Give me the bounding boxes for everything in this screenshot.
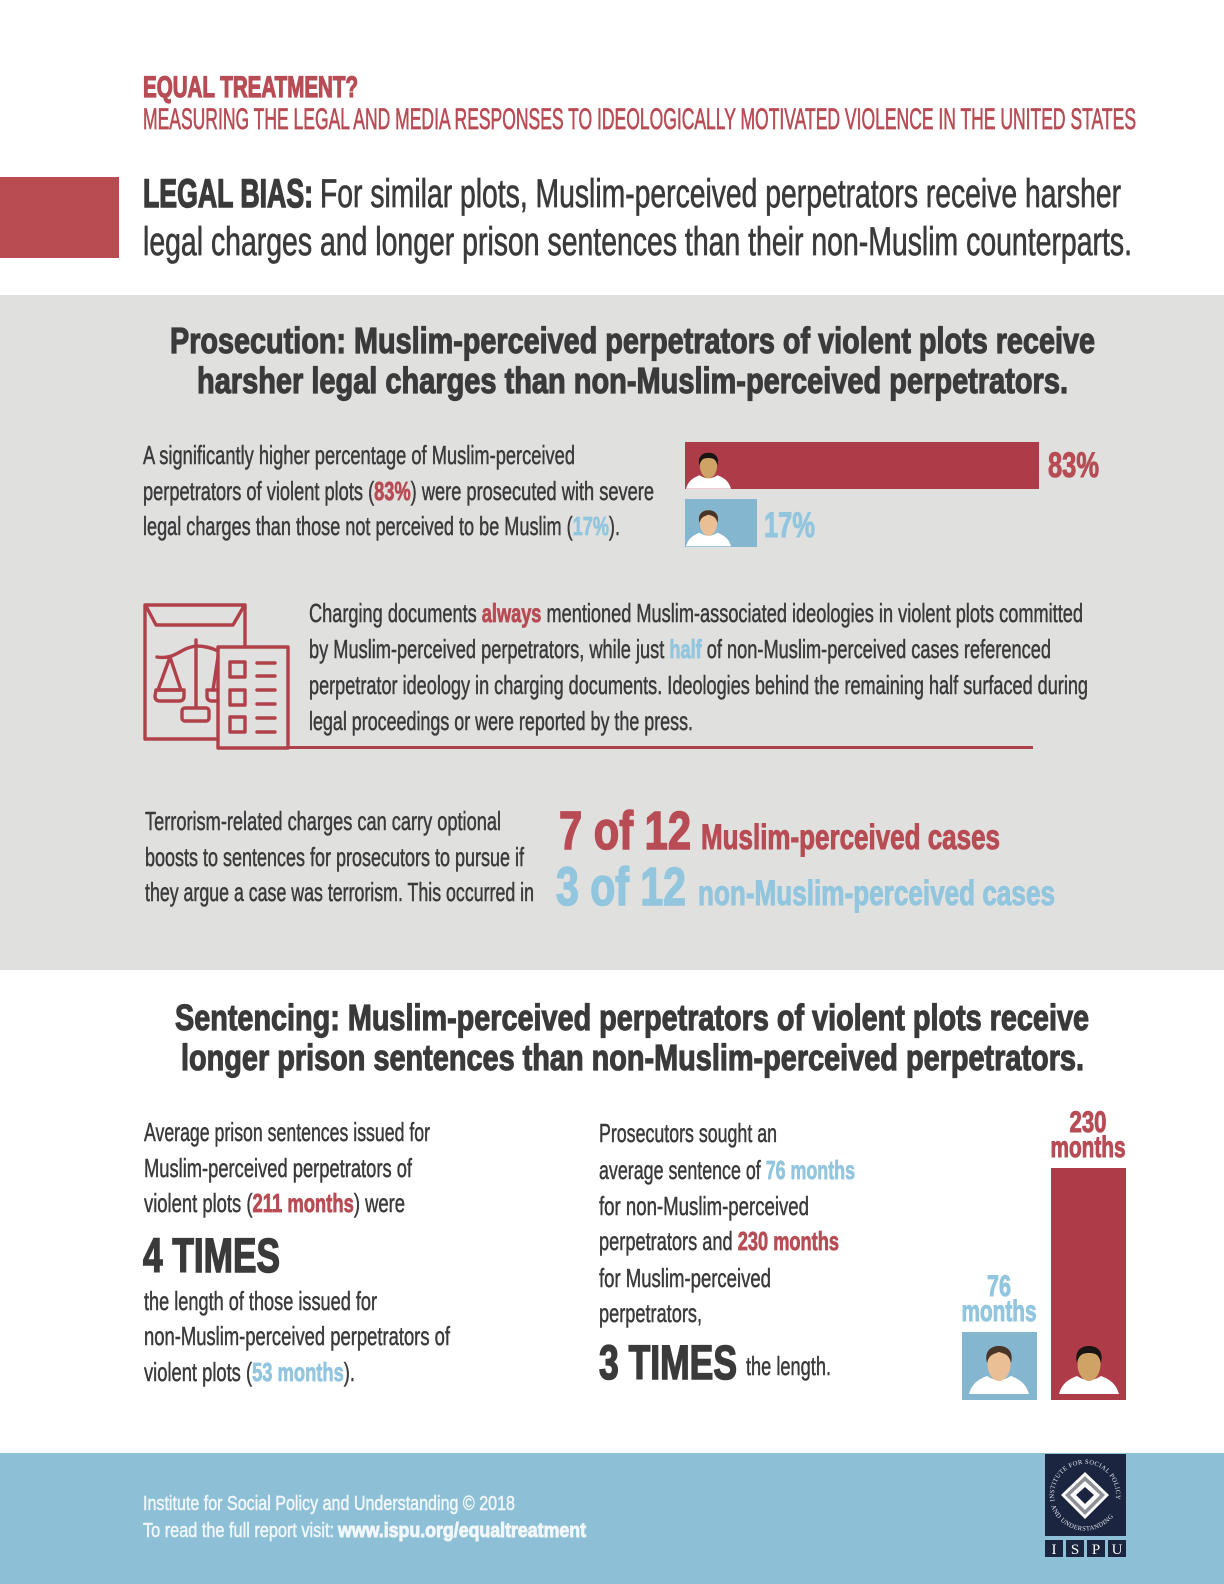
logo: ISPU: I [1052, 1542, 1056, 1558]
text: average sentences issued: non-Muslim-perceived perpetrators of [144, 1321, 451, 1351]
footer text: www.ispu.org/equaltreatment [337, 1520, 586, 1542]
label: 230 months: 230 [1070, 1106, 1106, 1139]
stat: 7 of 12 [559, 801, 1000, 861]
text: severe legal charges: A significantly higher percentage of Muslim-perceived [143, 440, 575, 470]
text: average sentences issued: the length of those issued for [144, 1286, 377, 1316]
text: charging documents: legal proceedings or were reported by the press. [309, 706, 693, 736]
stat: 4 times: 4 TIMES [143, 1230, 280, 1283]
icon: non-Muslim-perceived person [686, 510, 731, 546]
title [143, 71, 1136, 136]
label: 83%: 83% [1048, 446, 1099, 485]
footer [0, 1453, 1224, 1584]
icon: Muslim-perceived person [1059, 1346, 1119, 1394]
text: average sentences issued [143, 1117, 451, 1387]
title: EQUAL TREATMENT? [143, 71, 358, 104]
stat: 3 of 12 [556, 857, 1055, 917]
text: terrorism-related charges: they argue a case was terrorism. This occurred in [145, 877, 534, 907]
bar: 76 months [962, 1332, 1037, 1400]
text: average sentences issued: violent plots (53 months). [144, 1357, 355, 1387]
text: prosecutors sought: Prosecutors sought an [599, 1118, 777, 1148]
bar chart: months sought [962, 1106, 1126, 1400]
logo: ISPU: P [1092, 1542, 1100, 1558]
text: terrorism-related charges [145, 806, 534, 907]
divider line under icon [288, 746, 1033, 749]
bar chart: severe charges [685, 442, 1099, 547]
text: severe legal charges [143, 440, 654, 541]
logo: ISPU: AND UNDERSTANDING [1051, 1506, 1113, 1531]
logo: ISPU [1045, 1454, 1126, 1558]
red accent block [0, 177, 119, 258]
icon: legal documents with scales [145, 605, 288, 748]
stat: 3 times: 3 TIMES [599, 1337, 737, 1390]
text: charging documents: by Muslim-perceived perpetrators, while just half of non-Muslim-perceived cases referenced [309, 634, 1051, 664]
icon: Muslim-perceived person [686, 453, 731, 489]
text: prosecutors sought: average sentence of 76 months [599, 1155, 855, 1185]
label: 76 months [962, 1270, 1036, 1328]
text: average sentences issued: Muslim-perceived perpetrators of [144, 1153, 413, 1183]
bar: 83% [685, 442, 1039, 489]
text: severe legal charges: perpetrators of violent plots (83%) were prosecuted with severe [143, 476, 654, 506]
label: 17%: 17% [764, 506, 815, 545]
label: 76 months: 76 [987, 1270, 1011, 1303]
text: average sentences issued: violent plots (211 months) were [144, 1188, 405, 1218]
text: prosecutors sought: for Muslim-perceived [599, 1263, 771, 1293]
sentencing heading [175, 997, 1089, 1078]
text: prosecutors sought: the length. [746, 1351, 831, 1381]
label: 230 months [1050, 1106, 1126, 1164]
stat: 3 of 12: non-Muslim-perceived cases [698, 874, 1055, 913]
stat: 3 of 12: 3 of 12 [556, 857, 686, 917]
text: prosecutors sought: perpetrators and 230 months [599, 1226, 839, 1256]
label: 76 months: months [962, 1295, 1036, 1328]
stat: 7 of 12: 7 of 12 [559, 801, 691, 861]
text: charging documents [309, 598, 1088, 736]
icon: non-Muslim-perceived person [969, 1346, 1029, 1394]
legal bias statement: LEGAL BIAS: [143, 172, 313, 216]
text: prosecutors sought [599, 1118, 855, 1390]
footer text: Institute for Social Policy and Understanding © 2018 [143, 1493, 515, 1515]
logo: ISPU: INSTITUTE FOR SOCIAL POLICY [1050, 1460, 1120, 1502]
stat: 7 of 12: Muslim-perceived cases [701, 818, 1000, 857]
logo: ISPU: S [1071, 1542, 1079, 1558]
text: terrorism-related charges: boosts to sentences for prosecutors to pursue if [145, 842, 525, 872]
logo: ISPU: U [1112, 1542, 1123, 1558]
legal bias statement [143, 172, 1132, 264]
bar: 230 months [1051, 1168, 1126, 1400]
label: 230 months: months [1050, 1131, 1126, 1164]
text: terrorism-related charges: Terrorism-related charges can carry optional [145, 806, 501, 836]
panel: prosecution [0, 295, 1224, 970]
text: prosecutors sought: for non-Muslim-perceived [599, 1191, 809, 1221]
text: prosecutors sought: perpetrators, [599, 1298, 702, 1328]
bar: 17% [685, 499, 757, 547]
prosecution heading [170, 320, 1095, 401]
text: severe legal charges: legal charges than those not perceived to be Muslim (17%). [143, 511, 620, 541]
footer text [143, 1493, 586, 1542]
text: average sentences issued: Average prison sentences issued for [144, 1117, 430, 1147]
footer text: To read the full report visit: [143, 1520, 334, 1542]
